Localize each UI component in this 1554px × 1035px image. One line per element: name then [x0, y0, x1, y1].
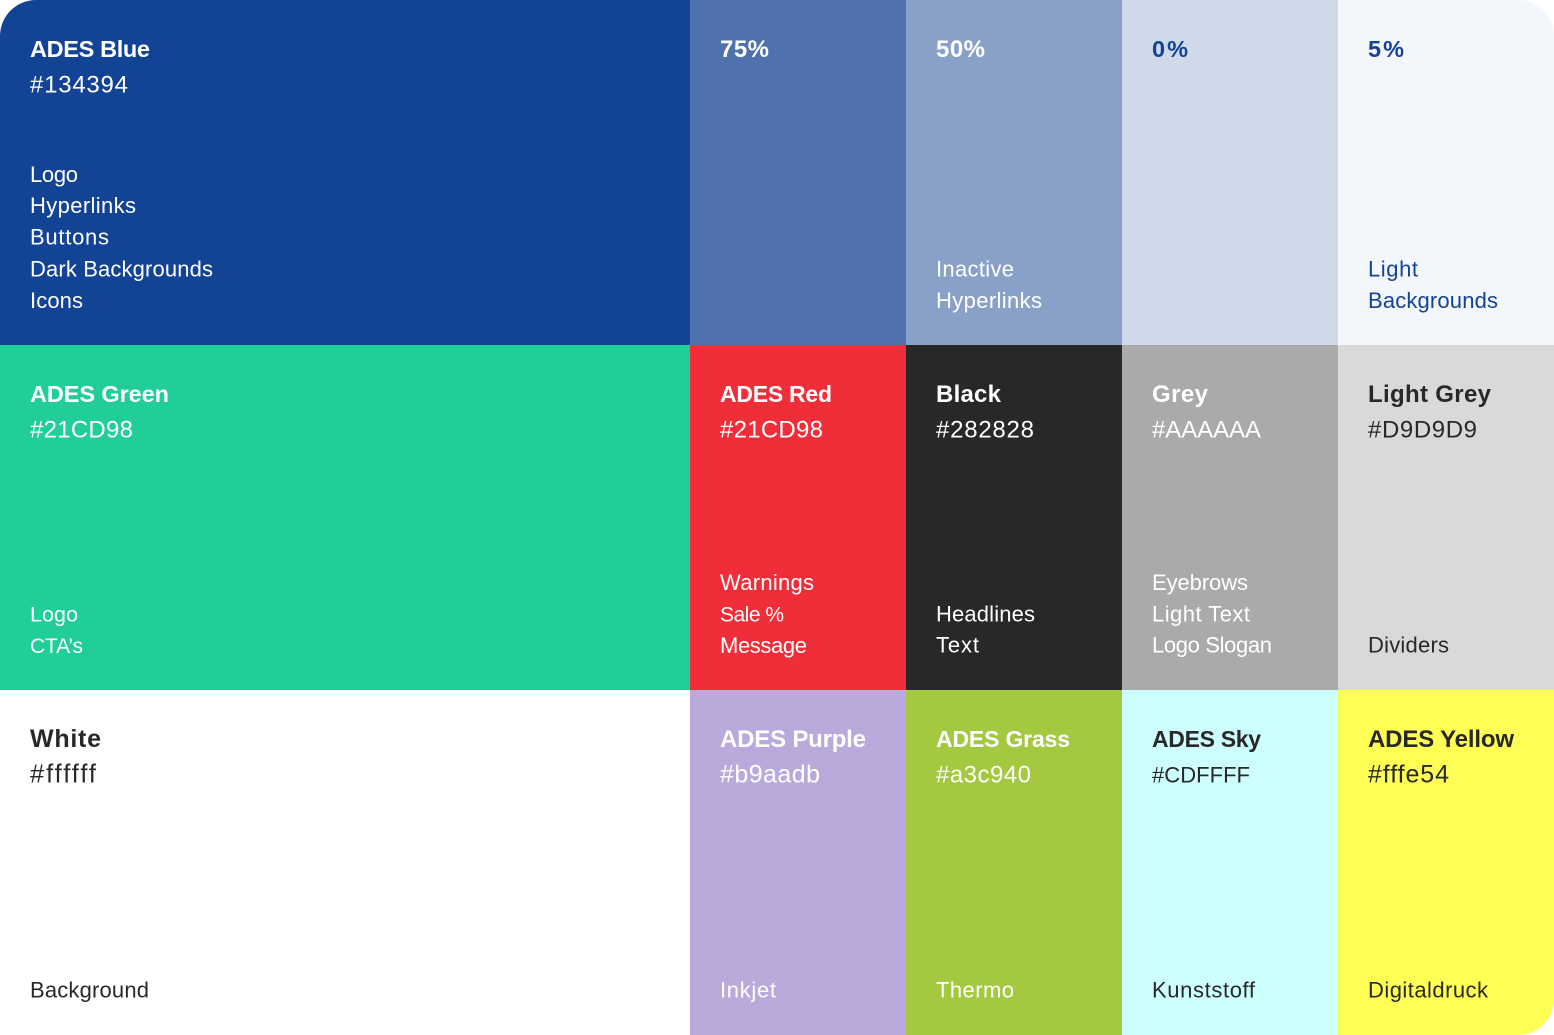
panel: ADES Red: Sale %	[720, 604, 784, 626]
panel: blue 5%: Backgrounds	[1368, 288, 1498, 313]
panel: ADES Sky	[1122, 690, 1338, 1035]
panel: ADES Green: CTA’s	[30, 635, 83, 658]
panel: ADES Yellow: ADES Yellow	[1368, 726, 1514, 753]
panel: ADES Blue: Hyperlinks	[30, 193, 136, 218]
panel: blue 75%: 75%	[720, 36, 769, 63]
panel: blue 50%: Inactive	[936, 256, 1014, 282]
panel: ADES Green	[0, 345, 690, 690]
panel: ADES Sky: #CDFFFF	[1152, 762, 1250, 788]
panel: Grey: Grey	[1152, 381, 1209, 408]
panel: ADES Red: #21CD98	[720, 416, 823, 444]
panel: ADES Blue: Icons	[30, 288, 83, 313]
panel: White: #ffffff	[30, 760, 97, 788]
panel: White: Background	[30, 978, 149, 1002]
panel: ADES Grass: ADES Grass	[936, 726, 1070, 752]
panel: ADES Green: ADES Green	[30, 381, 169, 407]
panel: ADES Green: #21CD98	[30, 416, 133, 444]
panel: ADES Purple: ADES Purple	[720, 726, 866, 753]
panel: ADES Red	[690, 345, 906, 690]
panel: ADES Purple: Inkjet	[720, 978, 776, 1002]
panel: blue 5%: Light	[1368, 256, 1418, 282]
panel: Grey	[1122, 345, 1338, 690]
panel: Black: Headlines	[936, 602, 1035, 626]
panel: Grey: Eyebrows	[1152, 570, 1248, 595]
panel: blue 50%	[906, 0, 1122, 345]
panel: Black: #282828	[936, 416, 1034, 444]
panel: ADES Sky: Kunststoff	[1152, 978, 1256, 1002]
panel: Grey: Light Text	[1152, 602, 1250, 626]
panel: ADES Sky: ADES Sky	[1152, 726, 1261, 752]
panel: Light Grey	[1338, 345, 1554, 690]
panel: ADES Grass: Thermo	[936, 978, 1014, 1002]
panel: ADES Blue: Logo	[30, 162, 78, 187]
panel: blue 50%: 50%	[936, 36, 985, 63]
panel: blue 50%: Hyperlinks	[936, 288, 1042, 313]
panel: ADES Blue: #134394	[30, 72, 128, 98]
panel: blue 0%	[1122, 0, 1338, 345]
panel: blue 5%: 5%	[1368, 36, 1404, 62]
panel: Black: Black	[936, 381, 1002, 408]
panel: Black	[906, 345, 1122, 690]
panel: ADES Red: Message	[720, 633, 807, 658]
panel: ADES Red: ADES Red	[720, 381, 832, 407]
panel: blue 75%	[690, 0, 906, 345]
panel: Light Grey: Light Grey	[1368, 381, 1492, 408]
panel: Grey: Logo Slogan	[1152, 632, 1272, 658]
panel: ADES Blue	[0, 0, 690, 345]
panel: ADES Yellow: #fffe54	[1368, 760, 1449, 788]
panel: ADES Purple	[690, 690, 906, 1035]
panel: Light Grey: Dividers	[1368, 632, 1449, 658]
panel: blue 0%: 0%	[1152, 36, 1188, 62]
panel: ADES Yellow: Digitaldruck	[1368, 978, 1489, 1002]
panel: ADES Grass: #a3c940	[936, 762, 1031, 788]
panel: ADES Yellow	[1338, 690, 1554, 1035]
panel: ADES Red: Warnings	[720, 570, 814, 595]
panel: Light Grey: #D9D9D9	[1368, 416, 1477, 444]
panel: ADES Blue: ADES Blue	[30, 36, 150, 62]
panel: ADES Blue: Dark Backgrounds	[30, 256, 213, 282]
panel: ADES Grass	[906, 690, 1122, 1035]
panel: Black: Text	[936, 632, 979, 658]
panel: Grey: #AAAAAA	[1152, 416, 1261, 444]
panel: ADES Purple: #b9aadb	[720, 760, 820, 788]
panel: White: White	[30, 725, 101, 753]
panel: White	[30, 729, 148, 1002]
panel: blue 5%	[1338, 0, 1554, 345]
panel: ADES Blue: Buttons	[30, 224, 109, 250]
panel: ADES Green: Logo	[30, 602, 78, 626]
